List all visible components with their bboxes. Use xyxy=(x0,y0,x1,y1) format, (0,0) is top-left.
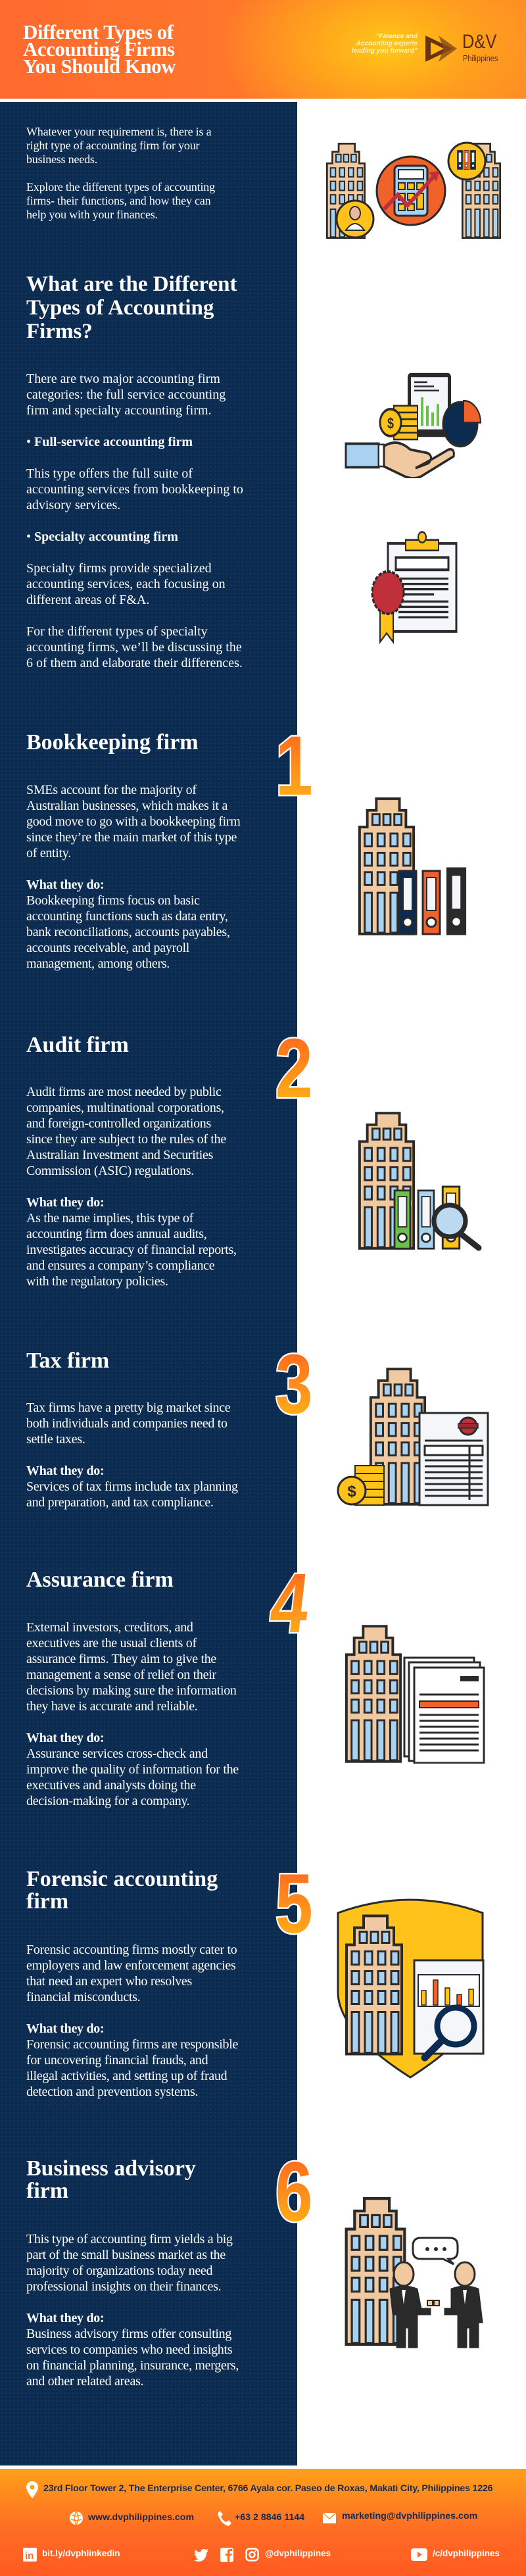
intro text: firms- their functions, and how they can xyxy=(26,194,210,207)
title xyxy=(23,20,176,78)
intro text: Explore the different types of accounting xyxy=(26,180,215,193)
heading: Business advisory xyxy=(26,2156,196,2181)
title: Accounting Firms xyxy=(23,37,175,61)
body: Tax firms have a pretty big market since xyxy=(26,1400,230,1415)
body: and preparation, and tax compliance. xyxy=(26,1495,214,1510)
body xyxy=(26,1620,239,1808)
heading: Assurance firm xyxy=(26,1568,174,1592)
text: two categories: This type offers the full suite of xyxy=(26,466,193,481)
body: majority of organizations today need xyxy=(26,2264,212,2278)
body: External investors, creditors, and xyxy=(26,1620,193,1635)
body: settle taxes. xyxy=(26,1432,85,1447)
intro text: business needs. xyxy=(26,153,97,166)
body: both individuals and companies need to xyxy=(26,1416,227,1431)
body: decision-making for a company. xyxy=(26,1794,190,1808)
icon: building with binders xyxy=(358,797,467,935)
body: bank reconciliations, accounts payables, xyxy=(26,925,230,939)
body: This type of accounting firm yields a big xyxy=(26,2232,233,2246)
section 2: audit xyxy=(26,1031,481,1289)
section 3: tax xyxy=(26,1347,489,1510)
heading: Bookkeeping firm xyxy=(26,730,199,755)
logo: Philippines xyxy=(463,53,498,63)
body: improve the quality of information for the xyxy=(26,1762,239,1777)
title: Different Types of xyxy=(23,20,174,43)
footer contact bar xyxy=(0,2469,526,2576)
text: two categories: different areas of F&A. xyxy=(26,593,149,607)
icon: building with two businessmen xyxy=(345,2197,483,2348)
icon: building with binders and magnifier xyxy=(358,1112,481,1251)
body: and ensures a company’s compliance xyxy=(26,1258,214,1273)
title: You Should Know xyxy=(23,55,176,78)
body: employers and law enforcement agencies xyxy=(26,1958,235,1973)
body xyxy=(26,2232,239,2389)
body: for uncovering financial frauds, and xyxy=(26,2053,208,2068)
heading: firm xyxy=(26,1889,68,1914)
icon: twitter xyxy=(194,2548,209,2562)
body: services to companies who need insights xyxy=(26,2342,232,2357)
contact row: marketing@dvphilippines.com xyxy=(342,2511,477,2521)
section 4: assurance xyxy=(26,1566,485,1808)
heading xyxy=(26,2156,196,2203)
icon: shield with building, chart and magnifier xyxy=(337,1898,484,2079)
logo xyxy=(425,31,498,63)
social row: /c/dvphilippines xyxy=(433,2548,500,2558)
logo: D&V xyxy=(462,31,496,53)
body: Business advisory firms offer consulting xyxy=(26,2327,231,2341)
body: since they are subject to the rules of the xyxy=(26,1132,226,1147)
body: Commission (ASIC) regulations. xyxy=(26,1164,194,1178)
icon: globe xyxy=(70,2512,83,2525)
address row xyxy=(26,2481,492,2498)
intro text: right type of accounting firm for your xyxy=(26,139,199,152)
heading: Tax firm xyxy=(26,1349,109,1373)
body: accounts receivable, and payroll xyxy=(26,941,189,955)
icon: facebook xyxy=(220,2548,233,2562)
icon: building with documents xyxy=(345,1625,485,1764)
text: two categories: For the different types of specialty xyxy=(26,624,208,639)
body: What they do: xyxy=(26,1464,104,1478)
social row: bit.ly/dvphlinkedin xyxy=(42,2548,120,2558)
body: Australian businesses, which makes it a xyxy=(26,799,227,813)
header banner xyxy=(0,0,526,99)
social row: @dvphilippines xyxy=(265,2548,331,2558)
intro text: help you with your finances. xyxy=(26,208,158,221)
intro text xyxy=(26,125,215,221)
icon: hand with money and report xyxy=(345,372,481,478)
heading: Forensic accounting xyxy=(26,1867,218,1891)
text: two categories: accounting services, each focusing on xyxy=(26,577,226,591)
text: two categories: firm and specialty accounting firm. xyxy=(26,403,212,418)
contact row: www.dvphilippines.com xyxy=(88,2512,194,2523)
body: that need an expert who resolves xyxy=(26,1974,192,1989)
tagline: “Finance and Accounting experts leading you forward” xyxy=(352,33,418,55)
body: of entity. xyxy=(26,846,71,860)
body xyxy=(26,1943,238,2099)
icon: phone xyxy=(218,2511,231,2526)
icon: certificate xyxy=(371,531,458,645)
icon: youtube xyxy=(411,2548,427,2561)
body: accounting functions such as data entry, xyxy=(26,909,228,924)
body: What they do: xyxy=(26,2021,104,2036)
body: companies, multinational corporations, xyxy=(26,1101,224,1115)
heading: what are the types: Types of Accounting xyxy=(26,296,214,320)
section 6: business advisory xyxy=(26,2155,483,2389)
body: decisions by making sure the information xyxy=(26,1683,237,1698)
social row xyxy=(22,2546,506,2564)
icon: hand with money and report: $ xyxy=(387,415,394,432)
text: two categories: accounting firms, we’ll be discussing the xyxy=(26,640,242,655)
text: two categories: Specialty firms provide specialized xyxy=(26,561,212,576)
left navy column xyxy=(0,102,297,2465)
heading xyxy=(26,1867,218,1914)
text: two categories: accounting services from bookkeeping to xyxy=(26,482,243,497)
body: What they do: xyxy=(26,878,104,892)
body: What they do: xyxy=(26,2311,104,2325)
body xyxy=(26,783,241,971)
body: financial misconducts. xyxy=(26,1990,140,2004)
body: executives and analysts doing the xyxy=(26,1778,196,1793)
heading: firm xyxy=(26,2179,68,2203)
heading: what are the types xyxy=(26,272,237,343)
body: management, among others. xyxy=(26,956,170,971)
icon: building with tax document and coins: $ xyxy=(347,1483,356,1500)
body: Forensic accounting firms mostly cater to xyxy=(26,1943,237,1957)
icon: building with tax document and coins xyxy=(337,1368,489,1506)
body: good move to go with a bookkeeping firm xyxy=(26,814,240,829)
text: two categories xyxy=(26,372,243,670)
intro text: Whatever your requirement is, there is a xyxy=(26,125,211,138)
heading: what are the types: What are the Different xyxy=(26,272,237,296)
body: management a sense of relief on their xyxy=(26,1668,216,1682)
body: accounting firm does annual audits, xyxy=(26,1227,206,1241)
icon: location pin xyxy=(26,2481,38,2498)
icon: linkedin xyxy=(23,2548,37,2562)
text: two categories: advisory services. xyxy=(26,498,120,512)
body: part of the small business market as the xyxy=(26,2248,226,2262)
body: they have is accurate and reliable. xyxy=(26,1699,197,1714)
body: illegal activities, and setting up of fraud xyxy=(26,2069,227,2083)
contact row xyxy=(70,2511,477,2526)
body: Bookkeeping firms focus on basic xyxy=(26,893,200,908)
body: on financial planning, insurance, mergers, xyxy=(26,2358,239,2373)
body: executives are the usual clients of xyxy=(26,1636,197,1650)
heading: what are the types: Firms? xyxy=(26,320,93,343)
icon: instagram xyxy=(245,2548,259,2562)
heading: Audit firm xyxy=(26,1033,129,1057)
body: Services of tax firms include tax planning xyxy=(26,1479,238,1494)
text: two categories: categories: the full service accounting xyxy=(26,387,226,402)
text: two categories: 6 of them and elaborate their differences. xyxy=(26,656,243,670)
icon: intro buildings with calculator xyxy=(326,142,501,239)
text: two categories: • Specialty accounting firm xyxy=(26,530,178,544)
text: two categories: • Full-service accounting firm xyxy=(26,435,193,449)
body: professional insights on their finances. xyxy=(26,2279,221,2294)
icon: mail xyxy=(322,2513,337,2523)
body: Forensic accounting firms are responsible xyxy=(26,2037,238,2052)
contact row: +63 2 8846 1144 xyxy=(235,2512,304,2523)
body: SMEs account for the majority of xyxy=(26,783,197,797)
body: assurance firms. They aim to give the xyxy=(26,1652,216,1666)
address row: 23rd Floor Tower 2, The Enterprise Center, 6766 Ayala cor. Paseo de Roxas, Makati City, Philippines 1226 xyxy=(43,2483,492,2494)
body: Australian Investment and Securities xyxy=(26,1148,213,1162)
body: since they’re the main market of this type xyxy=(26,830,237,845)
body: with the regulatory policies. xyxy=(26,1274,168,1289)
body xyxy=(26,1400,238,1510)
body: and other related areas. xyxy=(26,2374,143,2389)
body: investigates accuracy of financial reports, xyxy=(26,1243,237,1257)
icon: linkedin: in xyxy=(25,2550,34,2562)
body: What they do: xyxy=(26,1195,104,1210)
section 5: forensic xyxy=(26,1867,484,2099)
body: What they do: xyxy=(26,1731,104,1745)
body: Audit firms are most needed by public xyxy=(26,1085,222,1099)
body: Assurance services cross-check and xyxy=(26,1746,208,1761)
body: detection and prevention systems. xyxy=(26,2085,198,2099)
body: As the name implies, this type of xyxy=(26,1211,193,1226)
section 1: bookkeeping xyxy=(26,729,467,971)
text: two categories: There are two major accounting firm xyxy=(26,372,220,386)
body xyxy=(26,1085,237,1289)
body: and foreign-controlled organizations xyxy=(26,1116,211,1131)
